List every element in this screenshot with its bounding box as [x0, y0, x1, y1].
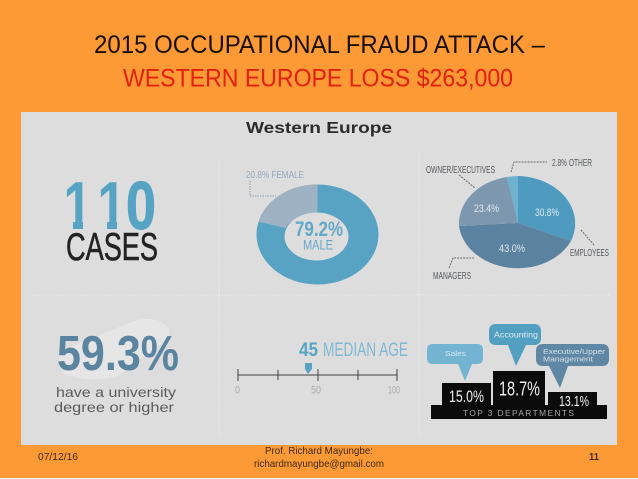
axis labels: 0 [235, 384, 240, 396]
degree caption: degree or higher [54, 399, 174, 415]
slice values: 23.4% [474, 203, 499, 215]
bubble: executive/upper management: Management [543, 354, 594, 364]
panel: median age [235, 340, 408, 396]
podium values [449, 378, 589, 410]
bubble: accounting: Accounting [494, 330, 538, 340]
slice: owner/executives [459, 177, 518, 226]
slice: employees [518, 176, 575, 241]
podium values: 15.0% [449, 387, 484, 406]
slice values: 30.8% [535, 207, 559, 219]
slice: other [507, 176, 518, 223]
median age heading: 45 [299, 340, 318, 361]
female share [259, 184, 318, 228]
panel: case count [60, 168, 158, 269]
age axis [238, 369, 397, 381]
slice: managers [459, 223, 571, 268]
slice labels: 2.8% OTHER [552, 158, 592, 169]
panel: gender donut chart [246, 170, 378, 284]
footer author: richardmayungbe@gmail.com [254, 458, 384, 470]
degree caption [54, 384, 176, 415]
podium [431, 371, 607, 419]
donut hole [284, 212, 348, 260]
podium values: 18.7% [499, 378, 540, 400]
cases label: CASES [66, 226, 158, 269]
bubble: executive/upper management [536, 344, 609, 388]
slice labels: MANAGERS [433, 271, 471, 282]
title: WESTERN EUROPE LOSS $263,000 [123, 64, 513, 92]
degree caption: have a university [56, 384, 176, 400]
axis labels: 100 [388, 384, 400, 396]
panel: perpetrator position pie chart [426, 158, 609, 282]
axis labels: 50 [311, 384, 321, 396]
podium caption: TOP 3 DEPARTMENTS [463, 408, 574, 418]
bubble: sales: Sales [445, 351, 467, 358]
podium values: 13.1% [559, 393, 589, 410]
110 figure [60, 168, 156, 244]
panel: top 3 departments [427, 324, 609, 419]
110 figure: 1 [97, 168, 126, 244]
slice labels: OWNER/EXECUTIVES [426, 165, 495, 176]
leader lines [449, 162, 594, 268]
male label: 79.2% [295, 218, 343, 241]
bubble: executive/upper management: Executive/Upper [543, 347, 606, 356]
110 figure: 0 [126, 168, 156, 244]
marker: age 45 [305, 363, 312, 374]
slice labels [426, 158, 609, 282]
title: 2015 OCCUPATIONAL FRAUD ATTACK – [94, 31, 545, 59]
percent figure: 59.3% [57, 327, 179, 381]
footer author: Prof. Richard Mayungbe: [265, 445, 373, 457]
panel: infographic background [21, 112, 617, 445]
heading: Western Europe: Western Europe [246, 120, 392, 137]
slide number: 11 [589, 451, 599, 463]
110 figure: 1 [63, 168, 92, 244]
bubble: sales [427, 344, 483, 381]
female label: 20.8% FEMALE [246, 170, 304, 181]
male label [295, 218, 343, 252]
footer author [254, 445, 384, 470]
footer [38, 445, 599, 470]
bubble: accounting [489, 324, 541, 366]
title [94, 31, 545, 92]
slice values [474, 203, 559, 255]
panel: university degree [54, 319, 179, 415]
axis labels [235, 384, 400, 396]
slice labels: EMPLOYEES [570, 248, 609, 259]
male share [256, 184, 378, 284]
footer date: 07/12/16 [38, 451, 78, 463]
icon: diploma [59, 319, 169, 379]
panel: median age: MEDIAN AGE [323, 340, 408, 361]
slice values: 43.0% [499, 243, 525, 255]
male label: MALE [303, 238, 333, 252]
